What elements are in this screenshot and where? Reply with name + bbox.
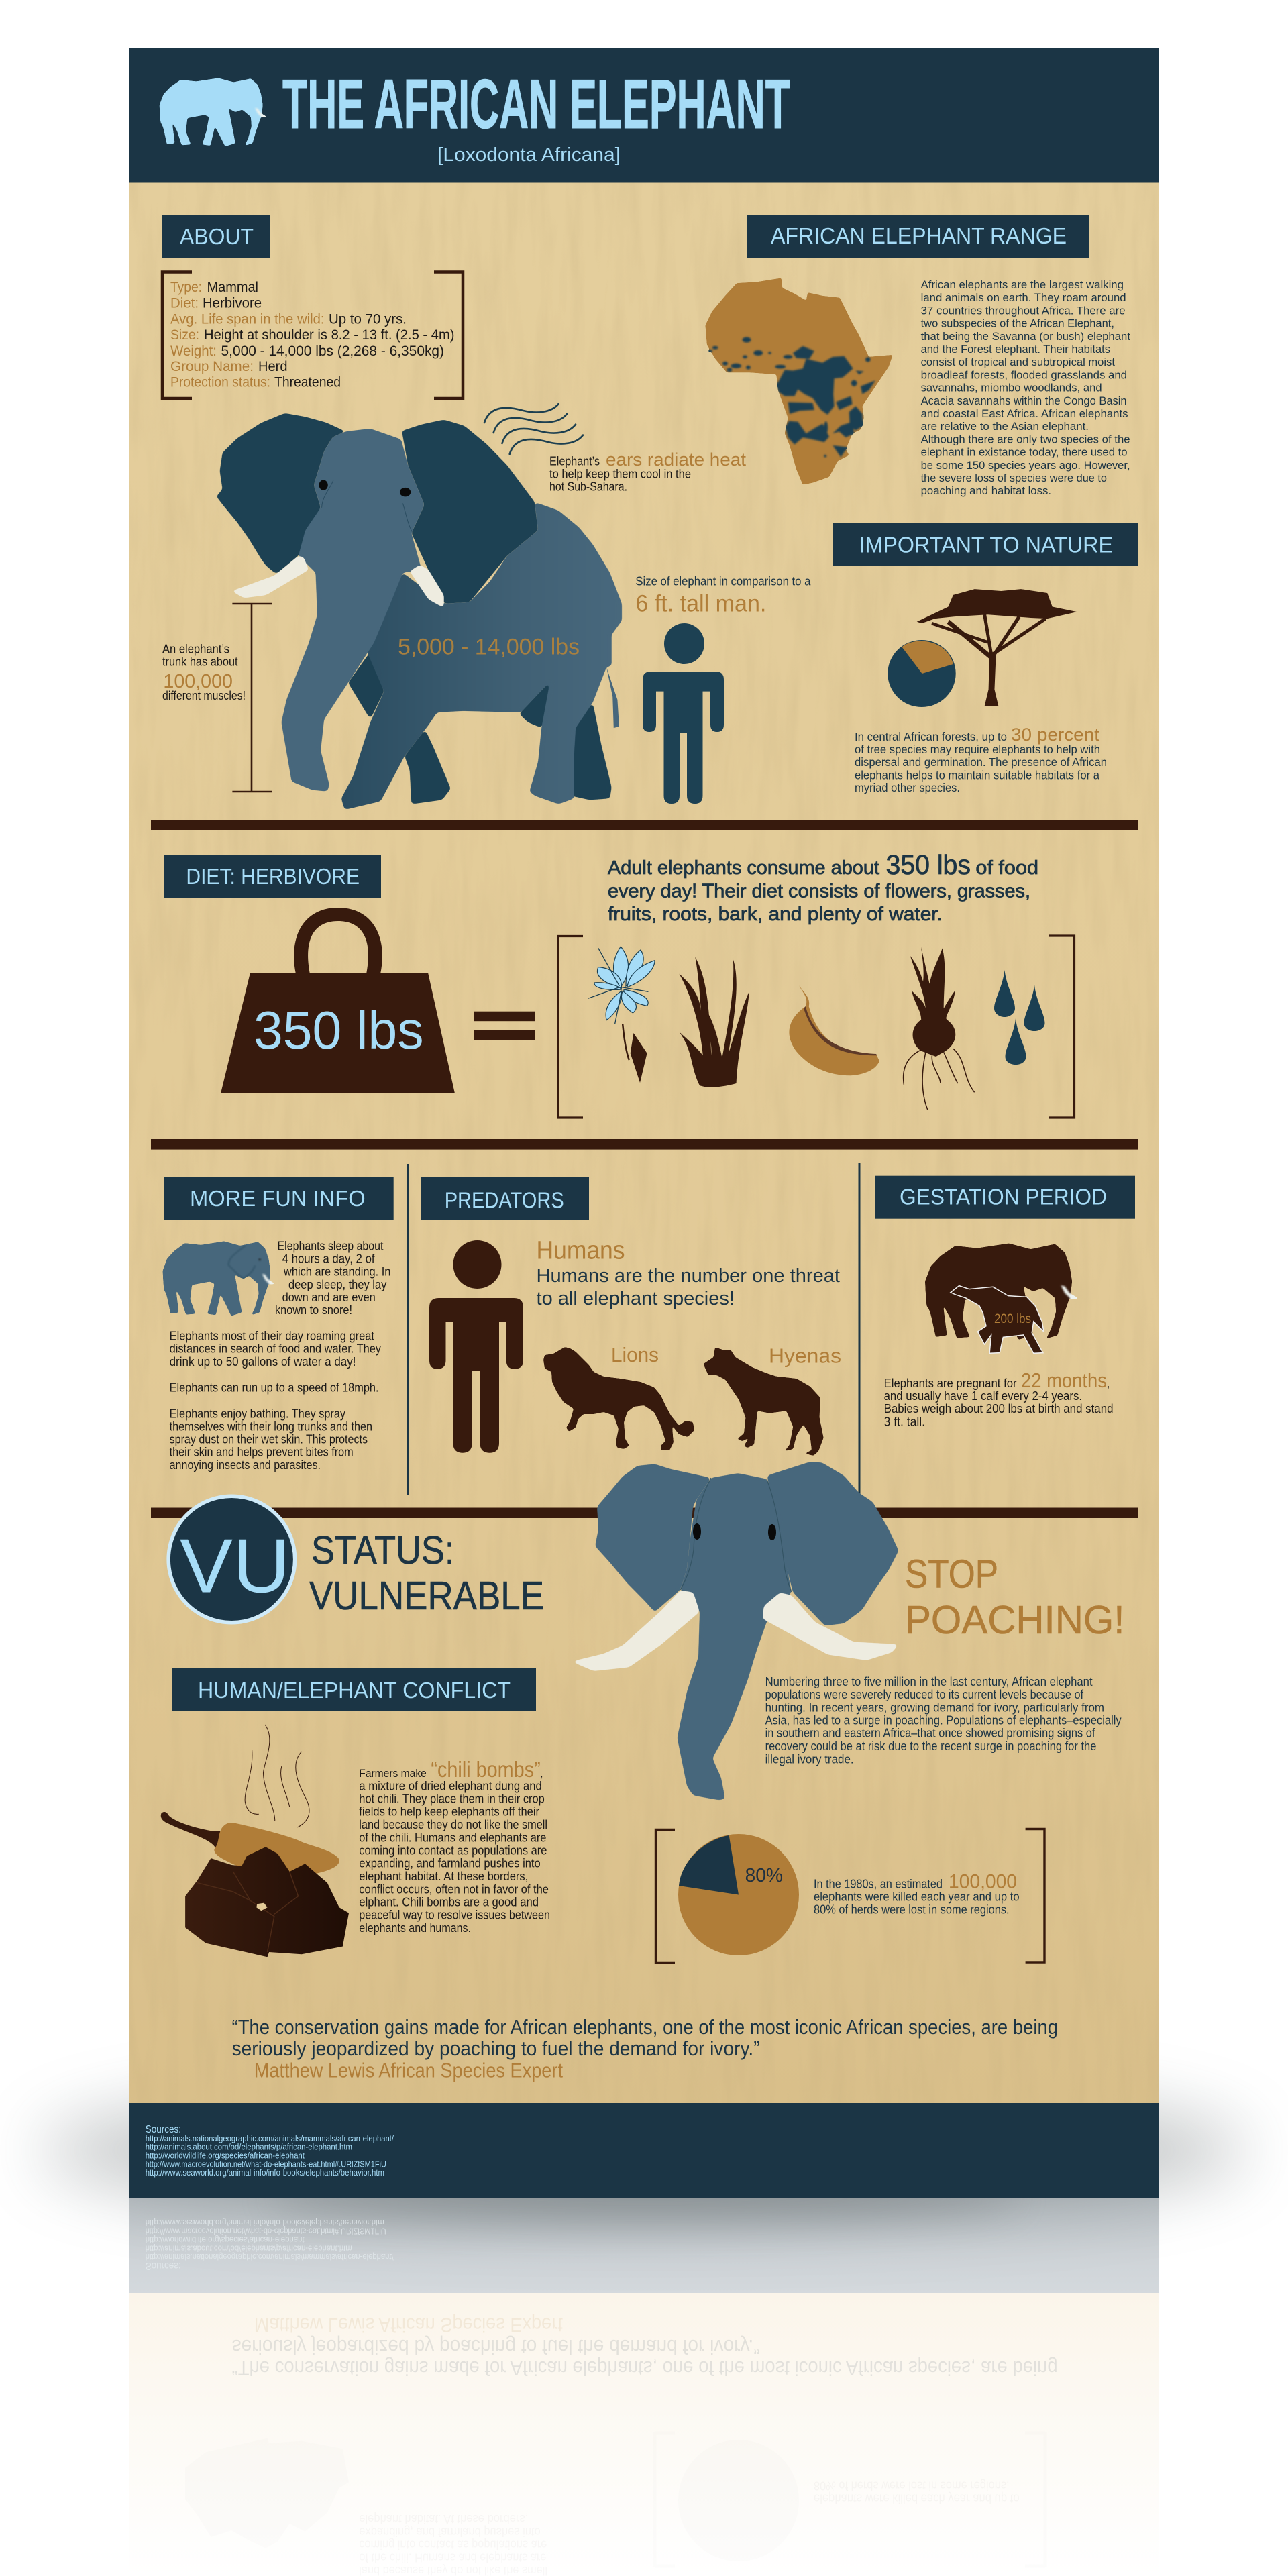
reflected sources: http://animals.about.com/od/elephants/p/african-elephant.htm [146,2243,352,2253]
text: range description: consist of tropical and subtropical moist [921,356,1115,368]
footer [129,2103,1159,2198]
reflected sources: http://worldwildlife.org/species/african-elephant [146,2235,305,2244]
heading: important to nature: IMPORTANT TO NATURE [859,533,1113,557]
text: range description: land animals on earth. They roam around [921,291,1126,304]
text: chili description: “chili bombs” [431,1757,541,1782]
callout: size comparison [635,574,811,617]
text: fun facts: their skin and helps prevent bites from [170,1446,354,1459]
illustration: elephant head [572,1462,899,1800]
right ear [402,419,538,604]
about facts: Protection status: [170,374,270,390]
text: nature description: 30 percent [1011,724,1100,745]
reflection of the paper [129,2293,1159,2576]
text: range description: the severe loss of species were due to [921,472,1107,484]
about facts: Avg. Life span in the wild: [170,311,325,327]
text: chili description: peaceful way to resolve issues between [359,1909,550,1922]
text: statistic description [814,1870,1020,1917]
sources: Sources: [146,2124,181,2135]
text: humans: Humans [537,1237,625,1265]
text: chili description: expanding, and farmland pushes into [359,1857,541,1870]
reflected chili and statistic text: elephant habitat. At these borders, [359,2512,528,2526]
callout: ears radiate heat: Elephant’s [549,455,600,468]
text: nature description [855,724,1107,794]
heading: stop poaching [905,1552,1124,1642]
badge: VU [166,1495,297,1625]
text: range description [921,278,1130,497]
reflected sources [146,2218,394,2271]
icon: small blue elephant [163,1241,276,1316]
paper texture [129,182,1159,2103]
icon: header elephant [160,78,268,146]
icon: equals sign [474,1012,535,1040]
callout: size comparison: Size of elephant in comparison to a [635,574,811,588]
sources [146,2124,394,2178]
panel: important to nature [833,523,1138,794]
text: range description: poaching and habitat loss. [921,484,1051,497]
heading: stop poaching: POACHING! [905,1598,1124,1642]
reflected chili and statistic text: 80% of herds were lost in some regions. [814,2479,1010,2492]
text: range description: Although there are only two species of the [921,433,1130,445]
text: fun facts: deep sleep, they lay [288,1278,386,1291]
text: nature description: of tree species may require elephants to help with [855,743,1100,756]
text: poaching description: in southern and eastern Africa–that once showed promising signs of [765,1727,1095,1740]
divider 2 [151,1139,1138,1150]
panel: about [162,215,463,398]
chart: 80 percent pie: 80% [745,1865,783,1886]
chart: 30 percent pie [888,640,956,707]
callout: ears radiate heat: ears radiate heat [606,449,747,470]
panel: more fun info [163,1177,394,1472]
heading: status vulnerable: VULNERABLE [309,1574,544,1618]
tusks [231,555,309,598]
eyes and face lines [319,480,412,532]
brackets: diet foods [558,936,1075,1118]
reflected quote: seriously jeopardized by poaching to fuel the demand for ivory.” [232,2335,760,2359]
left ear [216,413,345,574]
callout: ears radiate heat [549,449,747,494]
dung [185,1847,349,1957]
panel: human elephant conflict [161,1668,550,1957]
reflected sources: http://www.seaworld.org/animal-info/info-books/elephants/behavior.htm [146,2218,384,2227]
text: poaching description: Numbering three to five million in the last century, African elephant [765,1675,1093,1688]
callout: trunk muscles: different muscles! [162,689,246,702]
text: gestation description [884,1368,1114,1429]
text: humans [537,1237,840,1309]
icon: kettlebell weight [221,908,455,1093]
callout: trunk muscles: trunk has about [162,655,238,668]
about facts: Herbivore [203,296,262,311]
panel: diet [164,849,1075,1118]
about facts: Type: [170,280,202,295]
illustration: large elephant [216,413,622,810]
icon: water drops [994,970,1045,1065]
panel: gestation period [875,1176,1135,1429]
heading: range [747,215,1089,258]
text: fun facts: Elephants can run up to a speed of 18mph. [170,1381,378,1394]
reflected chili and statistic text: of the chili. Humans and elephants are [359,2551,546,2565]
text: chili description: elphant. Chili bombs are a good and [359,1896,539,1909]
mother elephant [925,1244,1079,1340]
heading: more fun info: MORE FUN INFO [190,1186,366,1211]
body [341,502,622,810]
chart: 80 percent pie [678,1834,799,1955]
panel: poaching statistic [656,1829,1044,1963]
brackets: statistic [656,1829,1044,1963]
text: chili description: hot chili. They place them in their crop [359,1792,545,1805]
text: range description: and the Forest elephant. Their habitats [921,343,1110,356]
text: chili description: of the chili. Humans and elephants are [359,1831,546,1844]
badge: VU: VU [180,1524,290,1609]
text: gestation description: and usually have 1 calf every 2-4 years. [884,1389,1082,1403]
text: statistic description: In the 1980s, an estimated [814,1877,943,1890]
divider 1 [151,820,1138,830]
heading: about: ABOUT [180,224,254,249]
icon: man for scale [643,623,724,804]
icon: heat waves [484,404,583,454]
text: poaching description: hunting. In recent years, growing demand for ivory, particularly from [765,1701,1104,1715]
text: statistic description: elephants were killed each year and up to [814,1890,1020,1903]
text: diet description: every day! Their diet consists of flowers, grasses, [608,881,1030,902]
header band [129,48,1159,182]
head and trunk [281,429,425,792]
callout: ears radiate heat: to help keep them cool in the [549,468,691,481]
reflected chili and statistic text: expanding, and farmland pushes into [359,2525,541,2538]
far legs [348,651,612,804]
panel: status [166,1495,544,1625]
about facts: Herd [258,359,287,374]
text: diet description: fruits, roots, bark, and plenty of water. [608,904,943,925]
callout: ears radiate heat: hot Sub-Sahara. [549,480,627,494]
callout: trunk muscles [162,643,246,702]
text: nature description: dispersal and germination. The presence of African [855,755,1107,769]
subtitle: [Loxodonta Africana] [437,144,621,166]
elephant weight label: 5,000 - 14,000 lbs [398,635,580,660]
title: THE AFRICAN ELEPHANT [282,66,790,144]
callout: trunk muscles: 100,000 [163,671,233,692]
sources: http://www.seaworld.org/animal-info/info-books/elephants/behavior.htm [146,2168,384,2178]
icon: grass [679,957,749,1087]
sources: http://worldwildlife.org/species/african-elephant [146,2151,305,2161]
reflected chili and statistic text: elephants were killed each year and up to [814,2492,1020,2506]
heading: range: AFRICAN ELEPHANT RANGE [771,223,1067,248]
text: nature description: elephants helps to maintain suitable habitats for a [855,769,1099,782]
drop shadow on reflection [296,2198,992,2231]
text: range description: two subspecies of the African Elephant, [921,317,1114,330]
icon: banana [789,985,879,1075]
panel: african elephant range [705,215,1130,497]
eyes and face lines [680,1478,792,1592]
text: fun facts: spray dust on their wet skin. This protects [170,1433,368,1446]
text: humans: to all elephant species! [537,1288,735,1309]
text: range description: 37 countries throughout Africa. There are [921,304,1126,317]
label: lions: Lions [611,1343,659,1366]
text: humans: Humans are the number one threat [537,1265,840,1287]
chili stem [161,1812,225,1849]
text: chili description: coming into contact as populations are [359,1844,547,1858]
tail [606,667,619,728]
about facts: Size: [170,327,199,343]
text: statistic description: 100,000 [949,1870,1017,1892]
ears [595,1462,899,1625]
text: chili description: land because they do not like the smell [359,1818,547,1831]
heading: diet: DIET: HERBIVORE [186,864,360,889]
about facts: Mammal [207,280,258,295]
heading: stop poaching: STOP [905,1552,998,1597]
quote: Matthew Lewis African Species Expert [254,2059,563,2082]
text: fun facts: Elephants most of their day roaming great [170,1330,374,1343]
reflection panel under footer [129,2198,1159,2293]
about facts: Group Name: [170,359,254,374]
steam lines [245,1725,309,1827]
reflected chili and statistic text [359,2479,1020,2576]
icon: acacia tree [917,589,1077,706]
text: gestation description: 3 ft. tall. [884,1415,925,1429]
text: diet description: of food [975,857,1038,879]
text: gestation description: , [1107,1377,1110,1390]
text: fun facts: Elephants sleep about [278,1239,384,1252]
icon: root [904,947,975,1110]
text: chili description [359,1757,550,1935]
text: chili description: Farmers make [359,1767,427,1780]
icon: hyena [703,1347,824,1456]
text: fun facts: known to snore! [275,1303,352,1317]
text: diet description: 350 lbs [885,849,971,880]
icon: flower [588,947,655,1083]
heading: important to nature [833,523,1138,566]
text: gestation description: Elephants are pregnant for [884,1377,1017,1390]
about facts: Weight: [170,343,217,359]
mirrored reflection of lower poster content [146,2218,1058,2576]
about facts [170,280,455,390]
quote: seriously jeopardized by poaching to fuel the demand for ivory.” [232,2037,760,2060]
heading: diet [164,855,381,898]
text: range description: be some 150 species years ago. However, [921,459,1130,472]
sources: http://animals.nationalgeographic.com/animals/mammals/african-elephant/ [146,2134,394,2143]
about facts: Up to 70 yrs. [329,311,407,327]
text: chili description: elephants and humans. [359,1921,471,1935]
drop shadow beside poster [40,2080,1248,2220]
map: africa range [705,278,893,485]
reflected sources: Sources: [146,2260,181,2271]
reflected quote: “The conservation gains made for African elephants, one of the most iconic African species, are being [232,2357,1058,2380]
text: nature description: In central African forests, up to [855,730,1007,743]
icon: chili bomb [161,1725,349,1957]
chili pod [214,1823,339,1875]
icon: lion [543,1347,694,1450]
text: range description: Acacia savannahs within the Congo Basin [921,394,1127,407]
heading: more fun info [164,1177,394,1220]
text: fun facts: drink up to 50 gallons of water a day! [170,1355,356,1368]
vertical separators [408,1163,859,1503]
label: hyenas: Hyenas [769,1344,841,1368]
text: fun facts: annoying insects and parasites. [170,1458,321,1472]
reflected sources: http://animals.nationalgeographic.com/animals/mammals/african-elephant/ [146,2252,394,2261]
callout: size comparison: 6 ft. tall man. [635,591,766,617]
heading: predators: PREDATORS [445,1188,564,1213]
text: poaching description: recovery could be at risk due to the recent surge in poaching for the [765,1739,1096,1753]
text: poaching description [765,1675,1122,1766]
text: fun facts: themselves with their long trunks and then [170,1419,372,1433]
text: chili description: elephant habitat. At these borders, [359,1870,528,1883]
text: chili description: conflict occurs, often not in favor of the [359,1882,549,1896]
heading: gestation period: GESTATION PERIOD [900,1185,1107,1210]
text: diet description: Adult elephants consume about [608,857,879,879]
heading: conflict: HUMAN/ELEPHANT CONFLICT [198,1678,511,1703]
sources: http://www.macroevolution.net/what-do-elephants-eat.html#.URlZfSM1FiU [146,2159,386,2169]
heading: predators [421,1177,589,1220]
poster paper background [129,182,1159,2103]
text: poaching description: Asia, has led to a surge in poaching. Populations of elephants–especially [765,1713,1122,1727]
text: gestation description: Babies weigh about 200 lbs at birth and stand [884,1402,1114,1415]
divider 3 [151,1508,1138,1518]
text: range description: and coastal East Africa. African elephants [921,407,1128,420]
text: chili description: fields to help keep elephants off their [359,1805,539,1819]
callout: trunk muscles: An elephant’s [162,643,229,656]
text: range description: broadleaf forests, flooded grasslands and [921,368,1127,381]
text: poaching description: illegal ivory trade. [765,1752,854,1766]
text: chili description: , [541,1766,543,1780]
calf [951,1286,1044,1353]
heading: about [162,215,270,258]
calf weight: 200 lbs [994,1312,1031,1326]
quote [232,2015,1058,2082]
text: fun facts [170,1239,390,1472]
reflected quote [232,2313,1058,2380]
about facts: 5,000 - 14,000 lbs (2,268 - 6,350kg) [221,343,444,359]
text: fun facts: down and are even [282,1291,376,1304]
text: poaching description: populations were severely reduced to its current levels because of [765,1688,1084,1701]
text: fun facts: distances in search of food and water. They [170,1342,381,1356]
text: range description: savannahs, miombo woodlands, and [921,382,1102,394]
reflected chili and pie [185,2432,1045,2567]
about facts: Height at shoulder is 8.2 - 13 ft. (2.5 - 4m) [204,327,455,343]
heading: status vulnerable [309,1528,544,1618]
text: fun facts: Elephants enjoy bathing. They spray [170,1407,345,1420]
panel: predators [421,1177,841,1456]
tusks [572,1591,899,1671]
text: diet description [608,849,1038,925]
ruler: trunk measure [232,604,272,792]
text: nature description: myriad other species. [855,781,960,794]
text: chili description: a mixture of dried elephant dung and [359,1779,542,1792]
text: statistic description: 80% of herds were lost in some regions. [814,1903,1010,1917]
sources: http://animals.about.com/od/elephants/p/african-elephant.htm [146,2143,352,2152]
text: range description: African elephants are the largest walking [921,278,1124,291]
text: gestation description: 22 months [1021,1368,1107,1392]
text: fun facts: which are standing. In [283,1265,390,1279]
text: range description: are relative to the Asian elephant. [921,420,1089,433]
heading: gestation period [875,1176,1135,1219]
head and trunk [678,1473,792,1800]
icon: human [429,1240,523,1453]
reflected quote: Matthew Lewis African Species Expert [254,2313,563,2337]
icon: mother elephant and calf [925,1244,1079,1353]
text: fun facts: 4 hours a day, 2 of [282,1252,376,1266]
brackets: about [162,272,463,398]
text: range description: that being the Savanna (or bush) elephant [921,330,1130,343]
about facts: Diet: [170,296,199,311]
quote: “The conservation gains made for African elephants, one of the most iconic African species, are being [232,2015,1058,2039]
heading: conflict [172,1668,536,1711]
text: range description: elephant in existance today, there used to [921,446,1128,459]
heading: status vulnerable: STATUS: [311,1528,454,1572]
reflected sources: http://www.macroevolution.net/what-do-elephants-eat.html#.URlZfSM1FiU [146,2226,386,2236]
about facts: Threatened [274,374,341,390]
reflected chili and statistic text: coming into contact as populations are [359,2538,547,2551]
icon: kettlebell weight: 350 lbs [254,1000,424,1060]
